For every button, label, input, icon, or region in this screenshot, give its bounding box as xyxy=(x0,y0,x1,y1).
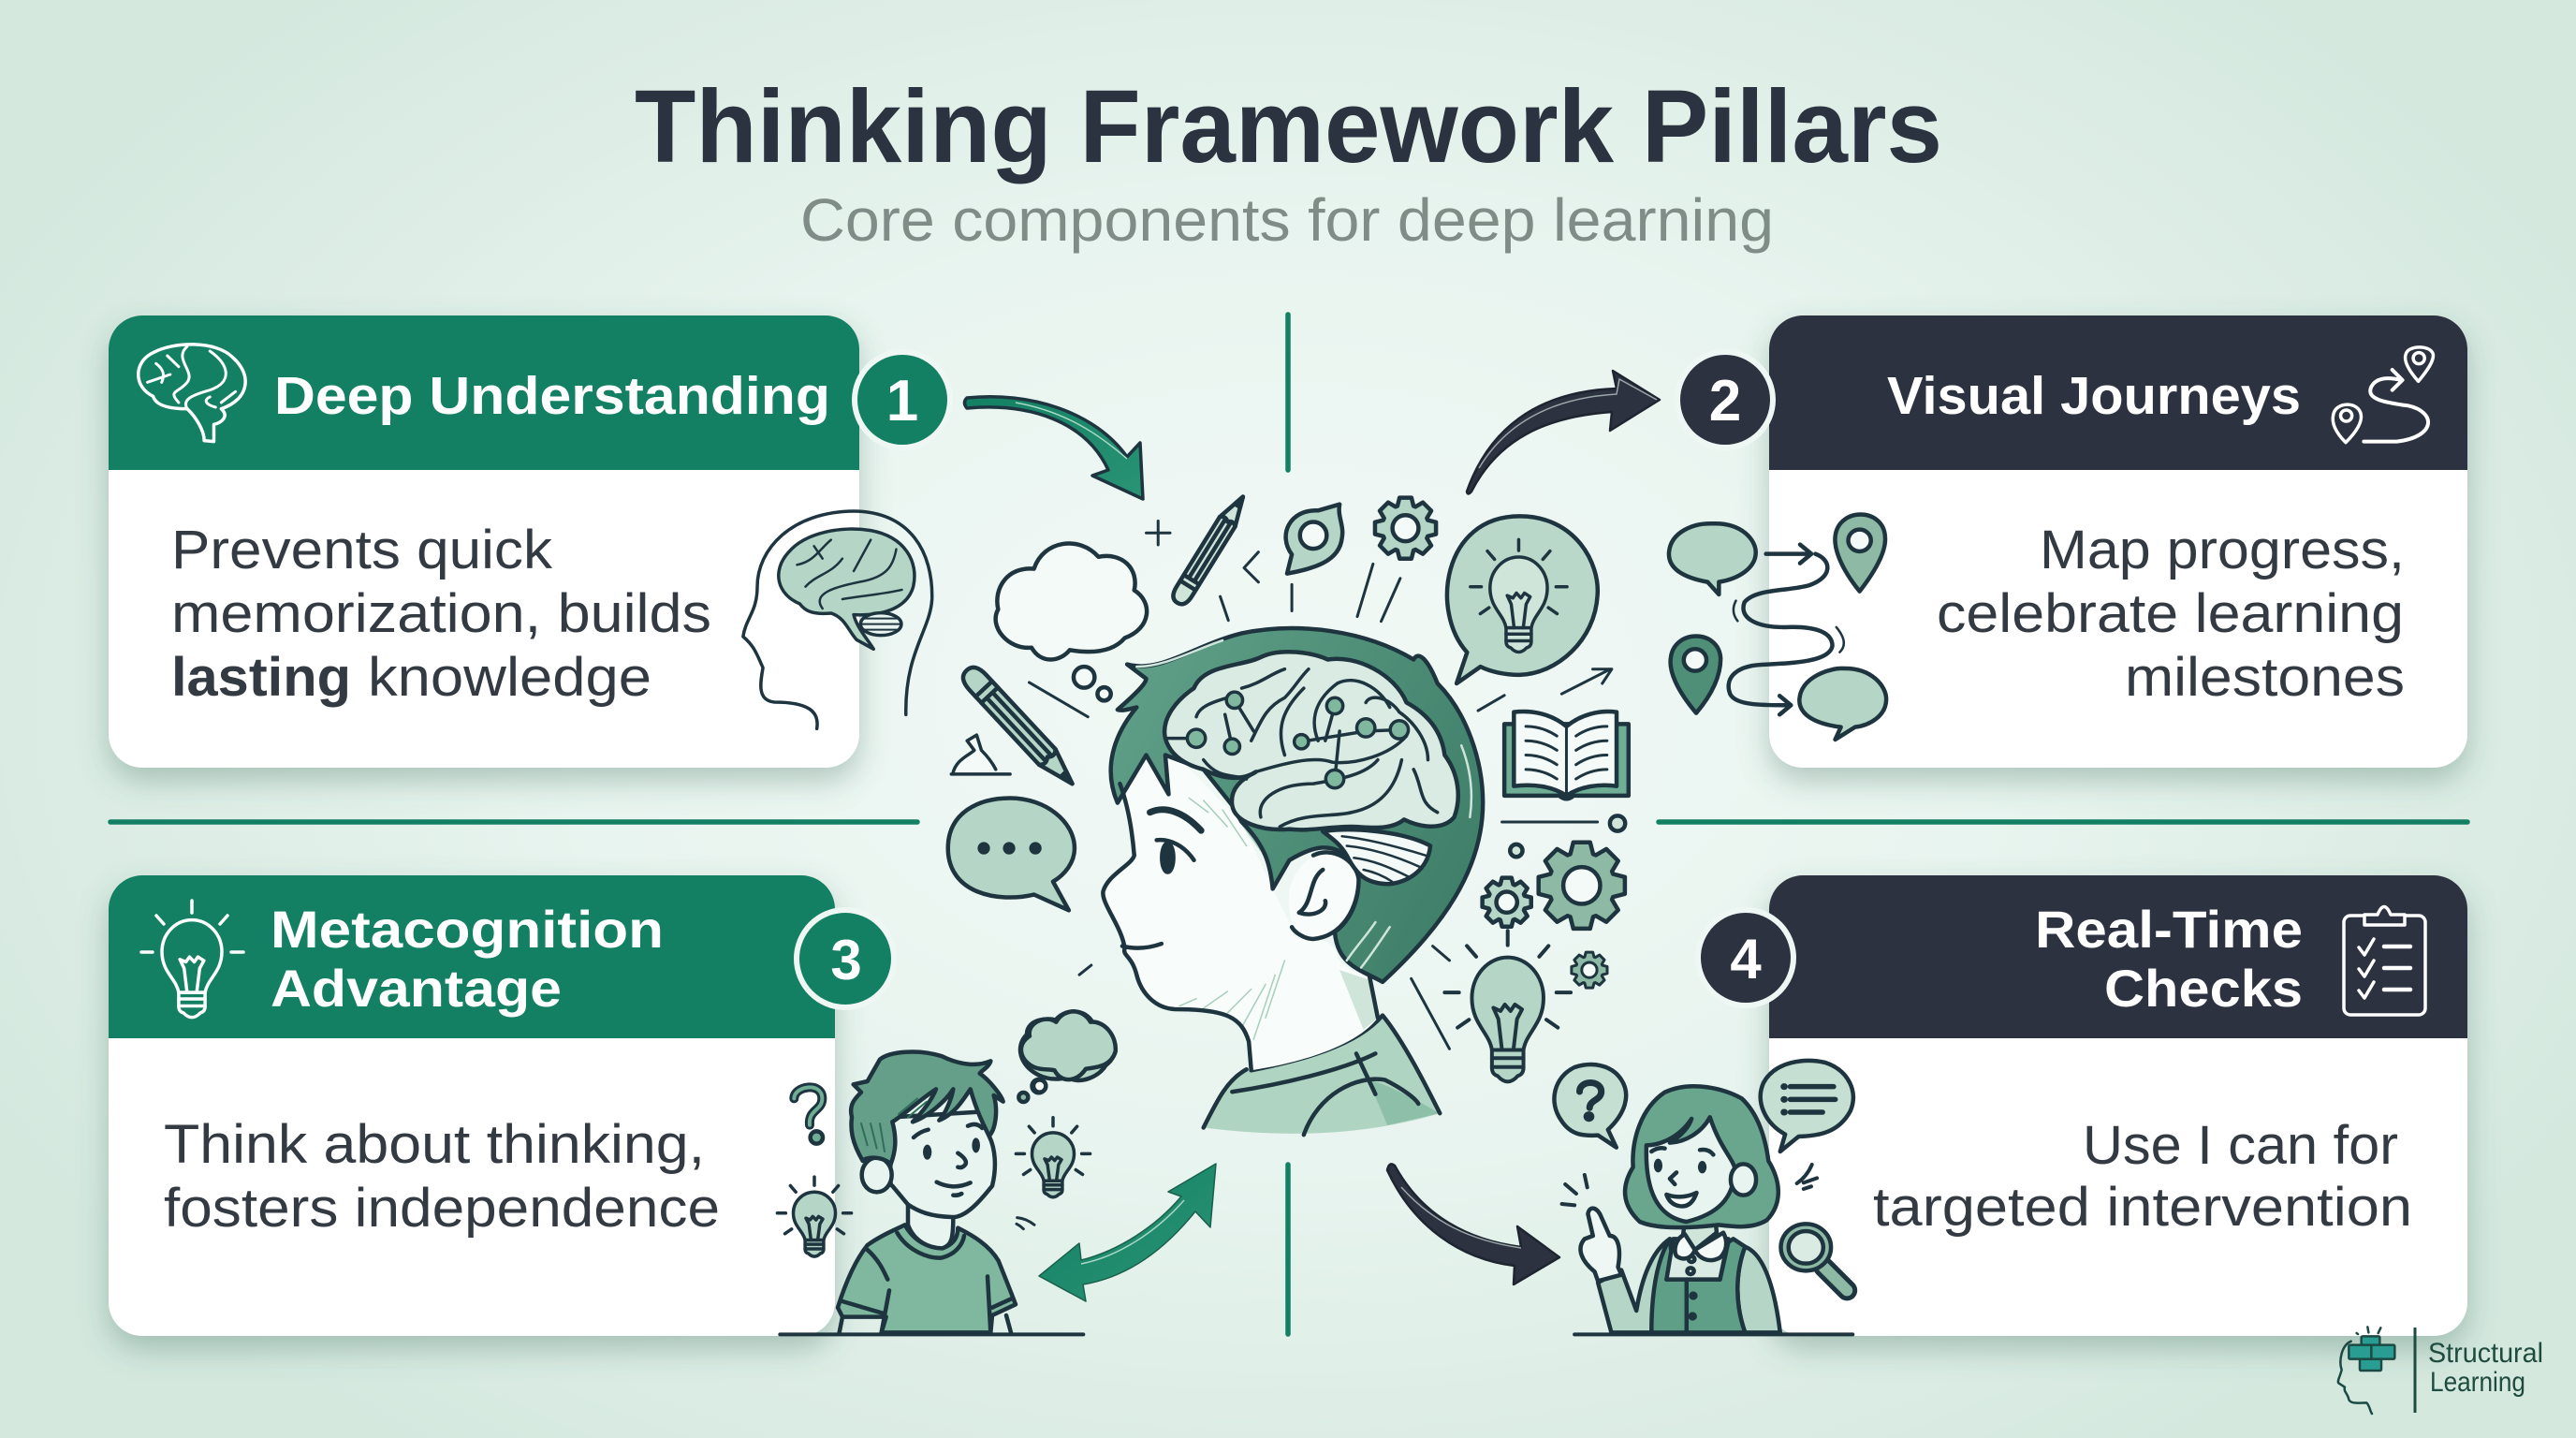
mouth xyxy=(1122,944,1162,948)
blouse xyxy=(1666,1239,1728,1280)
quadrant dividers xyxy=(110,315,2467,1334)
small figure xyxy=(951,735,1010,774)
floor line xyxy=(1574,1332,1852,1336)
small cloud xyxy=(1020,1011,1115,1080)
face profile xyxy=(1103,784,1378,1070)
speech bubble with dots xyxy=(948,798,1075,910)
icon: brain outline xyxy=(139,345,245,442)
ear xyxy=(1731,1164,1756,1196)
logo text: Structural xyxy=(2428,1338,2543,1369)
body text xyxy=(1937,520,2405,708)
header: Metacognition Advantage xyxy=(109,875,835,1038)
hair xyxy=(851,1052,1003,1164)
arrow: card 1 to centre xyxy=(964,397,1143,499)
arrow: centre to card 2 xyxy=(1467,371,1660,494)
body text xyxy=(171,520,711,708)
heading: Checks xyxy=(2104,959,2303,1018)
heading: Deep Understanding xyxy=(274,366,830,426)
panel: Visual Journeys xyxy=(1669,315,2467,768)
small marks xyxy=(1029,521,1612,1049)
panel: Deep Understanding xyxy=(109,315,953,768)
illustration: girl pointing xyxy=(1554,1061,1853,1334)
eyes xyxy=(923,1137,980,1160)
ear xyxy=(862,1158,892,1192)
eyes xyxy=(1654,1159,1706,1173)
tick marks xyxy=(1017,1218,1034,1229)
body text xyxy=(1873,1115,2412,1238)
body text: Think about thinking, xyxy=(164,1114,705,1175)
body text: celebrate learning xyxy=(1937,583,2404,644)
header: Deep Understanding xyxy=(109,315,859,470)
gear top xyxy=(1375,498,1436,559)
header: Real-Time Checks xyxy=(1769,875,2467,1038)
neck xyxy=(1683,1222,1717,1250)
badge 2 xyxy=(1675,349,1776,450)
arrow: double headed, centre and card 3 xyxy=(1039,1164,1216,1301)
face xyxy=(1647,1117,1735,1222)
body text: memorization, builds xyxy=(171,583,711,644)
body text: Use I can for xyxy=(2083,1115,2398,1176)
collar and buttons xyxy=(1675,1233,1726,1332)
ear xyxy=(1289,852,1359,939)
heading xyxy=(271,900,664,1018)
heading: Visual Journeys xyxy=(1887,366,2301,426)
pencil upper xyxy=(1169,492,1251,608)
illustration: boy thinking xyxy=(777,1011,1116,1334)
badge 3: 3 xyxy=(830,929,862,991)
panel: Metacognition Advantage xyxy=(109,875,897,1336)
floor line xyxy=(780,1332,1083,1336)
shirt xyxy=(1204,1016,1440,1135)
illustration: journey map xyxy=(1669,515,1886,740)
hair strands xyxy=(1136,640,1471,968)
badge 2: 2 xyxy=(1709,369,1741,433)
body text: fosters independence xyxy=(164,1178,720,1239)
illustration: head with brain icon in card 1 xyxy=(743,511,932,728)
illustration: central student head xyxy=(948,492,1629,1135)
bulb speech bubble xyxy=(1447,516,1598,683)
logo icon xyxy=(2338,1327,2394,1414)
thought dots xyxy=(1074,667,1111,700)
hair strands xyxy=(861,1098,927,1152)
icon: light bulb xyxy=(141,901,243,1018)
question mark xyxy=(794,1087,823,1144)
badge 3 xyxy=(794,907,897,1010)
tick marks xyxy=(1562,1165,1817,1205)
heading: Real-Time xyxy=(2035,900,2303,959)
dress xyxy=(1651,1239,1745,1332)
hair xyxy=(1625,1086,1778,1227)
panel: Real-Time Checks xyxy=(1695,875,2467,1336)
heading xyxy=(2035,900,2303,1018)
neck shading xyxy=(1339,970,1378,1030)
badge 4 xyxy=(1695,907,1796,1008)
logo text: Learning xyxy=(2430,1367,2525,1398)
heading: Advantage xyxy=(271,959,562,1018)
undercut hatch xyxy=(1323,829,1430,884)
shirt xyxy=(838,1225,1016,1332)
gears cluster xyxy=(1483,843,1625,988)
cloud dots xyxy=(1019,1079,1046,1101)
arrow: centre to card 4 xyxy=(1387,1164,1559,1284)
bulb left xyxy=(777,1177,852,1256)
neck xyxy=(908,1205,953,1248)
bulb right xyxy=(1016,1118,1090,1197)
body text: targeted intervention xyxy=(1873,1177,2412,1238)
logo text xyxy=(2428,1338,2543,1398)
badge 4: 4 xyxy=(1730,928,1762,990)
brain xyxy=(1164,652,1458,829)
header: Visual Journeys xyxy=(1769,315,2467,470)
list bubble xyxy=(1761,1061,1853,1152)
logo divider xyxy=(2413,1328,2417,1413)
icon: route with pins xyxy=(2333,347,2433,443)
brows nose mouth xyxy=(914,1124,982,1196)
body text: Prevents quick xyxy=(171,520,553,580)
cloud dots xyxy=(1018,1079,1046,1102)
mouth xyxy=(1666,1193,1696,1206)
eye and brow xyxy=(1150,810,1201,873)
body text: Map progress, xyxy=(2040,520,2405,580)
thought cloud xyxy=(996,544,1147,659)
hair xyxy=(1111,628,1483,982)
face and neck xyxy=(1103,745,1378,1070)
hand pointing xyxy=(1580,1209,1621,1281)
body text: knowledge xyxy=(368,647,651,708)
cloud xyxy=(1021,1011,1116,1079)
subtitle: Core components for deep learning xyxy=(800,186,1774,254)
pencil left xyxy=(959,663,1080,791)
open book xyxy=(1504,712,1629,799)
jaw hatching xyxy=(1179,798,1284,1039)
badge 1: 1 xyxy=(886,369,918,433)
brows and nose xyxy=(1651,1148,1713,1184)
sleeves xyxy=(1598,1239,1780,1332)
icon: clipboard checklist xyxy=(2344,906,2425,1015)
heading: Metacognition xyxy=(271,900,664,959)
bulb in bubble xyxy=(1471,539,1567,652)
small circles xyxy=(1510,815,1625,857)
face xyxy=(890,1111,995,1217)
magnifier xyxy=(1780,1224,1847,1290)
body text: milestones xyxy=(2125,647,2405,708)
question bubble xyxy=(1554,1064,1626,1148)
title: Thinking Framework Pillars xyxy=(635,69,1942,184)
logo: Structural Learning xyxy=(2338,1327,2543,1414)
body text: lasting xyxy=(171,647,351,708)
lower bulb xyxy=(1444,931,1571,1081)
badge 1 xyxy=(852,349,953,450)
body text xyxy=(164,1114,720,1239)
ring bubble xyxy=(1286,505,1342,574)
